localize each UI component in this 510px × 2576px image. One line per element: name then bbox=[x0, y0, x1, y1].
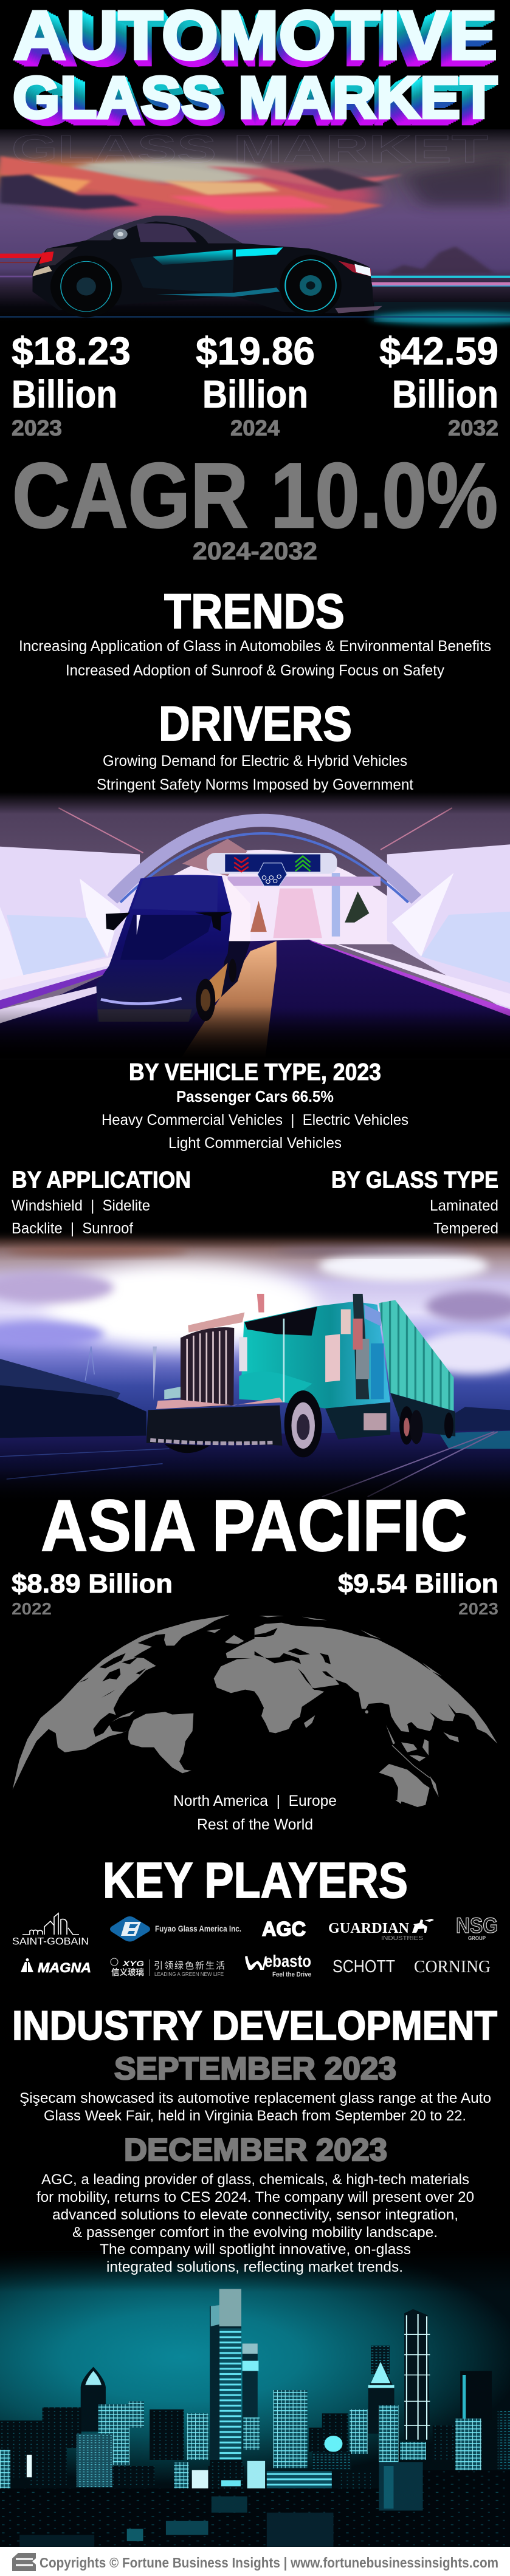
panel: by vehicle type: Heavy Commercial Vehicles | Electric Vehicles bbox=[102, 1112, 408, 1129]
panel: by application: BY APPLICATION bbox=[12, 1167, 191, 1193]
panel: by glass type: Laminated bbox=[430, 1197, 498, 1214]
stat: Asia Pacific 2022 bbox=[12, 1569, 173, 1618]
panel: December 2023 development: for mobility, returns to CES 2024. The company will present over 20 bbox=[36, 2189, 474, 2205]
panel: drivers bbox=[97, 697, 413, 793]
globe east: Africa, Eurasia and Australia bbox=[255, 1616, 497, 1807]
panel: other regions bbox=[173, 1792, 337, 1833]
stat: 2024 value bbox=[196, 329, 315, 440]
bridge and horizon bbox=[0, 1347, 510, 1440]
panel: by application: Windshield | Sidelite bbox=[12, 1197, 150, 1214]
logo: Xinyi Glass XYG bbox=[111, 1958, 225, 1977]
stat: 2023 value: $18.23 bbox=[12, 329, 131, 373]
icon: world globe map bbox=[13, 1614, 497, 1807]
CAGR figure: 2024-2032 bbox=[193, 537, 317, 565]
panel: trends: Increased Adoption of Sunroof & Growing Focus on Safety bbox=[66, 662, 444, 679]
logo: AGC: AGC bbox=[262, 1918, 306, 1940]
panel: by vehicle type: Light Commercial Vehicles bbox=[168, 1135, 342, 1152]
through-arch background bbox=[137, 850, 393, 944]
icon: sports car bbox=[33, 216, 382, 317]
logo: Schott: SCHOTT bbox=[333, 1957, 395, 1976]
stat: Asia Pacific 2023: 2023 bbox=[458, 1599, 498, 1618]
globe west: Americas and Greenland bbox=[13, 1614, 256, 1789]
panel: by vehicle type bbox=[102, 1059, 408, 1152]
panel: hero image of sports car at dusk bbox=[0, 128, 510, 324]
panel: drivers: Growing Demand for Electric & Hybrid Vehicles bbox=[103, 753, 407, 770]
logo: Guardian Industries: INDUSTRIES bbox=[381, 1935, 423, 1942]
panel: by vehicle type: BY VEHICLE TYPE, 2023 bbox=[129, 1059, 381, 1085]
panel: December 2023 development: & passenger comfort in the evolving mobility landscape. bbox=[72, 2224, 438, 2241]
near buildings bbox=[0, 2434, 510, 2547]
stat: 2024 value: Billion bbox=[202, 372, 308, 416]
panel: September 2023 development: Glass Week Fair, held in Virginia Beach from September 20 to 22. bbox=[44, 2108, 466, 2124]
panel: September 2023 development: SEPTEMBER 2023 bbox=[114, 2051, 396, 2086]
faint reflected title outline: GLASS MARKET bbox=[12, 128, 488, 171]
road bbox=[0, 940, 510, 1059]
logo: Corning: CORNING bbox=[414, 1957, 491, 1976]
road bbox=[0, 1430, 510, 1505]
logo: Webasto: ebasto bbox=[264, 1952, 311, 1970]
heading: key players: KEY PLAYERS bbox=[103, 1852, 408, 1908]
panel: drivers: DRIVERS bbox=[159, 697, 352, 751]
logo: NSG Group: GROUP bbox=[468, 1935, 486, 1941]
tunnel walls bbox=[0, 847, 140, 1006]
panel: trends: Increasing Application of Glass in Automobiles & Environmental Benefits bbox=[19, 638, 491, 655]
panel: other regions: Rest of the World bbox=[197, 1816, 313, 1833]
logo: Saint-Gobain: SAINT-GOBAIN bbox=[12, 1935, 89, 1947]
logo: NSG Group: NSG bbox=[456, 1914, 498, 1938]
panel: market size stats bbox=[12, 329, 498, 440]
stat: Asia Pacific 2022: $8.89 Billion bbox=[12, 1569, 173, 1599]
panel: December 2023 development: DECEMBER 2023 bbox=[124, 2133, 387, 2168]
panel: by application bbox=[12, 1167, 191, 1237]
panel: December 2023 development: integrated solutions, reflecting market trends. bbox=[106, 2259, 403, 2275]
stat: Asia Pacific 2023: $9.54 Billion bbox=[338, 1569, 498, 1599]
panel: city skyline image bbox=[0, 2252, 510, 2547]
logo: Magna bbox=[21, 1958, 91, 1975]
stat: 2032 value: 2032 bbox=[448, 415, 498, 440]
panel: drivers: Stringent Safety Norms Imposed by Government bbox=[97, 776, 413, 793]
panel: December 2023 development: The company will spotlight innovative, on-glass bbox=[100, 2241, 411, 2258]
icon: semi truck bbox=[146, 1294, 455, 1457]
logo: Webasto: Feel the Drive bbox=[272, 1971, 311, 1978]
logo: Fuyao Glass America bbox=[110, 1916, 241, 1941]
stat: Asia Pacific 2022: 2022 bbox=[12, 1599, 52, 1618]
icon: electric semi truck bbox=[96, 875, 250, 1022]
logo: Fuyao Glass America: Fuyao Glass America Inc. bbox=[155, 1924, 241, 1933]
trees bbox=[250, 901, 267, 932]
panel: highway truck image bbox=[0, 1230, 510, 1508]
panel: September 2023 development bbox=[19, 2051, 491, 2124]
panel: by vehicle type: Passenger Cars 66.5% bbox=[176, 1087, 334, 1105]
stat: 2032 value bbox=[379, 329, 498, 440]
title: GLASS MARKET bbox=[13, 64, 497, 131]
logo: Xinyi Glass XYG: 引领绿色新生活 bbox=[154, 1961, 225, 1971]
footer copyright bar bbox=[0, 2547, 510, 2576]
logo: Magna: MAGNA bbox=[38, 1960, 91, 1975]
sunset clouds bbox=[0, 156, 510, 220]
icon: Fortune Business Insights logo bbox=[12, 2553, 36, 2571]
stat: 2024 value: $19.86 bbox=[196, 329, 315, 373]
panel: other regions: North America | Europe bbox=[173, 1792, 337, 1809]
panel: December 2023 development: AGC, a leading provider of glass, chemicals, & high-tech materials bbox=[41, 2171, 469, 2188]
far skyline bbox=[0, 2289, 510, 2495]
panel: trends: TRENDS bbox=[164, 584, 345, 639]
title bbox=[13, 0, 497, 131]
logo: Webasto bbox=[245, 1952, 311, 1978]
panel: by glass type: Tempered bbox=[433, 1220, 498, 1237]
heading: Asia Pacific: ASIA PACIFIC bbox=[41, 1485, 467, 1566]
stat: 2023 value: 2023 bbox=[12, 415, 62, 440]
stat: 2024 value: 2024 bbox=[230, 415, 280, 440]
stat: 2032 value: $42.59 bbox=[379, 329, 498, 373]
stat: 2032 value: Billion bbox=[392, 372, 498, 416]
stat: Asia Pacific 2023 bbox=[338, 1569, 498, 1618]
logo: Xinyi Glass XYG: 信义玻璃 bbox=[111, 1967, 144, 1977]
road light streaks bbox=[0, 247, 510, 324]
logo: Xinyi Glass XYG: XYG bbox=[122, 1959, 144, 1968]
panel: electric truck in futuristic tunnel image bbox=[0, 792, 510, 1059]
clouds bbox=[0, 1245, 510, 1375]
panel: by glass type bbox=[331, 1167, 498, 1237]
panel: December 2023 development: advanced solutions to elevate connectivity, sensor integration, bbox=[52, 2207, 458, 2223]
logo: Guardian Industries: GUARDIAN bbox=[328, 1921, 410, 1936]
logo: Xinyi Glass XYG: LEADING A GREEN NEW LIFE bbox=[154, 1972, 224, 1977]
arch bbox=[112, 820, 416, 900]
panel: trends bbox=[19, 584, 491, 679]
stat: 2023 value bbox=[12, 329, 131, 440]
icon: gantry sign bbox=[207, 853, 381, 937]
panel: company logos bbox=[12, 1913, 498, 1978]
logo: Guardian Industries bbox=[328, 1919, 434, 1942]
logo: Saint-Gobain bbox=[12, 1913, 89, 1947]
stat: 2023 value: Billion bbox=[12, 372, 117, 416]
panel: December 2023 development bbox=[36, 2133, 474, 2275]
panel: September 2023 development: Şişecam showcased its automotive replacement glass range at the Auto bbox=[19, 2090, 491, 2106]
panel: by application: Backlite | Sunroof bbox=[12, 1220, 133, 1237]
